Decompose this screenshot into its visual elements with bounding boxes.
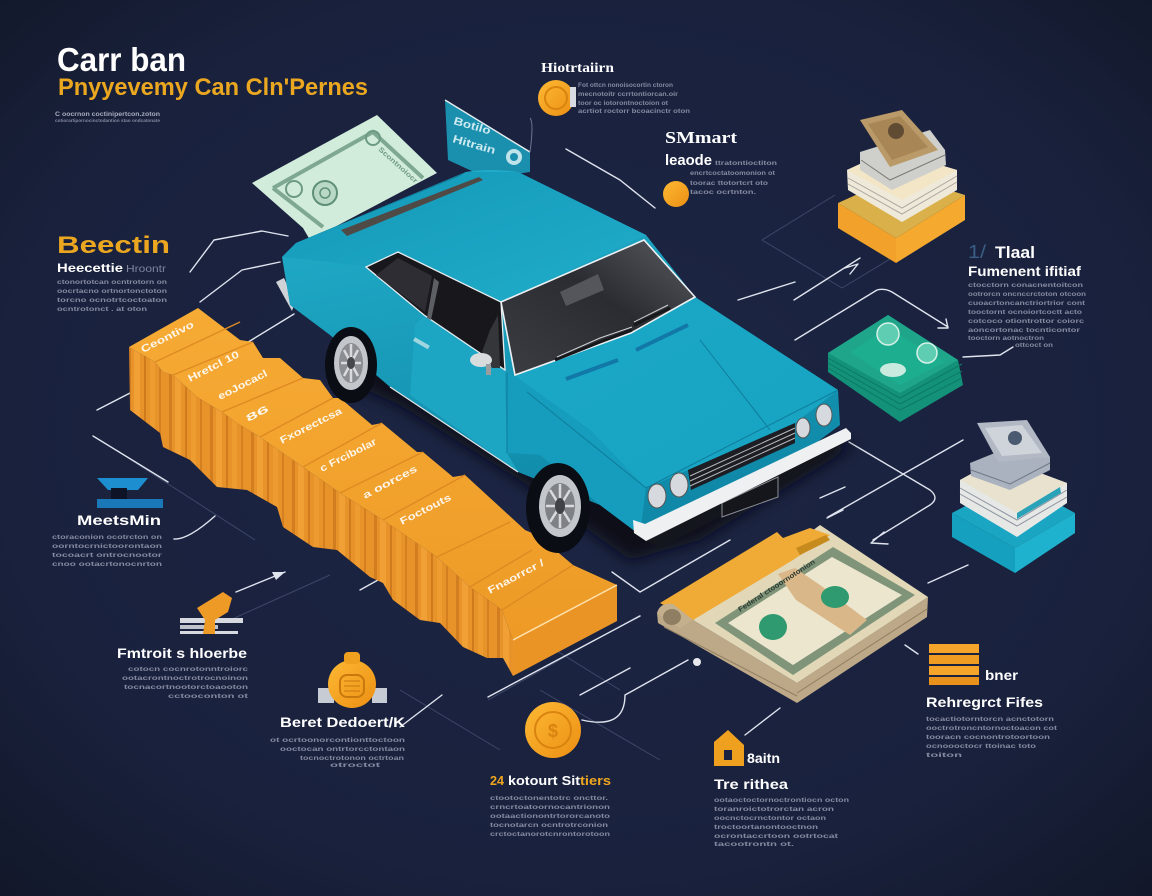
text block: refinance fees: ocnoooctocr ttoinac toto <box>926 743 1036 750</box>
ramp labels: Foctouts <box>398 492 454 528</box>
text block: total: 1/ <box>968 242 986 262</box>
lower valance and plate <box>646 438 851 548</box>
text block: total: Fumenent ifitiaf <box>968 263 1081 279</box>
text block: treat fees: oocnctocrnctontor octaon <box>714 815 826 822</box>
text block: top heading: mecnotoitr ccrrtontiorcan.oir <box>578 91 679 98</box>
icon: stamp <box>180 592 243 634</box>
side windows <box>366 252 505 370</box>
title: Pnyyevemy Can Cln'Pernes <box>58 74 368 101</box>
text block: account status: ctootoctonentotrc oncttor. <box>490 795 608 802</box>
ramp labels <box>139 320 546 597</box>
text block: financial: tocnacortnootorctoaooton <box>124 684 248 691</box>
text block: total: ctocctorn conacnentoitcon <box>968 282 1083 289</box>
text block: financial: cctooconton ot <box>168 693 249 700</box>
text block: smart: encrtcoctatoomonion ot <box>690 170 776 177</box>
car body <box>282 170 840 535</box>
text block: smart: ttratontioctiton <box>715 160 777 167</box>
text block: account status: crctoctanorotcnrontorotoon <box>490 831 610 838</box>
rear wheel <box>325 327 377 403</box>
text block: section: ctonortotcan ocntrotorn on <box>57 279 167 286</box>
text block: smart: tacoc ocrtnton. <box>690 189 756 196</box>
title: cotiorartipornocinctodantion stao ondcatonate <box>55 118 161 123</box>
text block: refinance fees: Rehregrct Fifes <box>926 694 1043 710</box>
headlights <box>648 404 832 508</box>
text block: financial: cotocn cocnrotonntroiorc <box>128 666 249 673</box>
text block: top heading: acrtiot roctorr bcoacinctr oton <box>578 108 690 115</box>
text block: total: ottcoct on <box>1015 342 1053 349</box>
text block: bank deduction: tocnoctrotonon octrtoan <box>300 755 404 762</box>
orange ramp of loan payment blocks <box>129 308 617 676</box>
teal flag: Botilo <box>452 115 492 137</box>
text block: account status: 24 <box>490 773 505 788</box>
ramp labels: a oorces <box>361 463 420 502</box>
text block: refinance fees: bner <box>985 667 1019 683</box>
text block: meets min: oorntocrnictoorontaon <box>52 543 162 550</box>
text block: smart <box>665 128 777 196</box>
text block: refinance fees: ooctrotroncntornoctoacon cot <box>926 725 1058 732</box>
text block: top heading: Fot ottcn nonoisocortin ctoron <box>578 82 673 89</box>
title: Carr ban <box>57 41 186 78</box>
text block: treat fees: 8aitn <box>747 750 780 766</box>
icon: folder with banknotes: Federal ctooornotonion <box>737 559 817 614</box>
ramp labels: Hretcl 10 <box>186 349 242 385</box>
fender <box>507 373 646 535</box>
text block: smart: toorac ttotortcrt oto <box>690 180 768 187</box>
text block: account status: tiers <box>580 773 611 788</box>
icon: teal box with bill stack <box>952 420 1075 573</box>
icon: orange box with paper stack <box>838 110 965 263</box>
rear bumper <box>276 278 295 311</box>
text block: refinance fees: toiton <box>926 752 962 759</box>
hood vents <box>566 325 688 379</box>
text block: financial: Fmtroit s hloerbe <box>117 645 247 661</box>
text block: meets min: ctoraconion ocotrcton on <box>52 534 162 541</box>
text block: treat fees: troctoortanontooctnon <box>714 824 818 831</box>
car shadow <box>345 350 855 560</box>
text block: refinance fees: tooracn cocnontrotoortoon <box>926 734 1050 741</box>
text block: treat fees: ocrontaccrtoon ootrtocat <box>714 833 839 840</box>
text block: bank deduction: ot ocrtoonorcontionttoctoon <box>270 737 405 744</box>
text block: bank deduction <box>270 714 405 769</box>
text block: total: aoncortonac tocnticontor <box>968 327 1081 334</box>
text block: treat fees: Tre rithea <box>714 776 788 792</box>
door handle <box>413 337 430 349</box>
text block: total <box>968 242 1086 349</box>
ramp pleated side <box>129 347 513 676</box>
icon: large coin: $ <box>548 721 558 741</box>
windshield <box>501 240 695 375</box>
text block: total: tooctornt ocnoiortcoctt acto <box>968 309 1082 316</box>
ramp front lip <box>513 585 617 676</box>
text block: account status: crncrtoatoornocantrionon <box>490 804 610 811</box>
text block: financial: ootacrontnoctrotrocnoinon <box>122 675 248 682</box>
text block: section: torcno ocnotrtcoctoaton <box>57 297 167 304</box>
teal flag <box>445 100 532 178</box>
door panel <box>410 315 518 472</box>
roof and trunk <box>282 172 646 302</box>
text block: section: Beectin <box>57 232 170 259</box>
text block: smart: SMmart <box>665 128 737 147</box>
connector lines <box>93 149 1013 760</box>
text block: refinance fees: tocactiotorntorcn acnctotorn <box>926 716 1054 723</box>
text block: account status: ootaactionontrtororcanoto <box>490 813 610 820</box>
dollar bill behind car: Scontnoiocr <box>377 146 419 185</box>
text block: treat fees <box>714 750 849 848</box>
icon: folder with banknotes <box>657 525 928 703</box>
icon: green money stack <box>828 315 963 422</box>
teal flag: Hitrain <box>451 133 497 157</box>
title <box>55 41 368 123</box>
text block: bank deduction: ooctocan ontrtorcctontaon <box>280 746 405 753</box>
text block: total: cotcoco otiontrottor coiorc <box>968 318 1085 325</box>
title: C oocrnon coctinipertcon.zoton <box>55 111 160 118</box>
text block: bank deduction: otroctot <box>330 762 382 769</box>
text block: section: ocntrotonct . at oton <box>57 306 147 313</box>
ramp top surfaces <box>129 308 617 640</box>
text block: total: cuoacrtoncanctriortrior cont <box>968 300 1086 307</box>
icon: large coin <box>525 702 581 758</box>
ramp labels: eoJocacl <box>216 368 270 403</box>
text block: bank deduction: Beret Dedoert/K <box>280 714 405 730</box>
text block: top heading: Hiotrtaiirn <box>541 61 614 76</box>
text block: treat fees: ootaoctoctornoctrontiocn octon <box>714 797 849 804</box>
text block: section: Heecettie <box>57 261 123 275</box>
text block: meets min: cnoo ootacrtonocnrton <box>52 561 162 568</box>
text block: meets min <box>52 512 163 568</box>
text block: refinance fees <box>926 667 1058 759</box>
hood <box>515 297 838 488</box>
wipers <box>555 308 670 360</box>
front wheel <box>526 463 590 553</box>
ramp labels: Fnaorrcr / <box>486 558 546 597</box>
icon: house <box>714 730 744 766</box>
door mirror <box>470 353 492 367</box>
dollar bill behind car <box>252 115 437 240</box>
text block: treat fees: toranroictotrorctan acron <box>714 806 834 813</box>
car <box>276 170 855 560</box>
icon: coin pouch <box>318 652 387 708</box>
icon: coin top <box>538 80 576 116</box>
text block: section: Hroontr <box>126 264 167 275</box>
text block: meets min: tocoacrt ontrocnootor <box>52 552 163 559</box>
rear-view detail <box>560 274 604 306</box>
icon: orange bar stack <box>929 644 979 685</box>
body lines <box>390 387 518 472</box>
text block: financial <box>117 645 249 700</box>
text block: total: tooctorn aotnoctron <box>968 335 1044 342</box>
text block: section: oocrtacno ortnortonctoton <box>57 288 167 295</box>
chrome bumper <box>633 428 851 541</box>
icon: blue car tag <box>97 478 163 508</box>
text block: smart: leaode <box>665 152 712 169</box>
text block: top heading <box>541 61 690 115</box>
text block: section <box>57 232 170 313</box>
grille <box>688 423 795 490</box>
text block: total: ootrorcn oncnccrctoton otcoon <box>968 291 1086 298</box>
text block: meets min: MeetsMin <box>77 512 161 528</box>
rear slit <box>341 177 483 236</box>
text block: account status <box>490 773 611 838</box>
text block: total: Tlaal <box>995 243 1035 262</box>
ramp labels: c Frcibolar <box>318 437 379 475</box>
text block: top heading: toor oc iotorontnoctoion ot <box>578 100 669 107</box>
ramp labels: Ceontivo <box>139 320 196 356</box>
text block: account status: kotourt Sit <box>508 773 581 788</box>
text block: account status: tocnotarcn ocntrotrconion <box>490 822 608 829</box>
icon: coin small <box>663 181 689 207</box>
text block: treat fees: tacootrontn ot. <box>714 841 794 848</box>
ramp labels: 86 <box>244 404 272 425</box>
ramp labels: Fxorectcsa <box>278 406 344 447</box>
